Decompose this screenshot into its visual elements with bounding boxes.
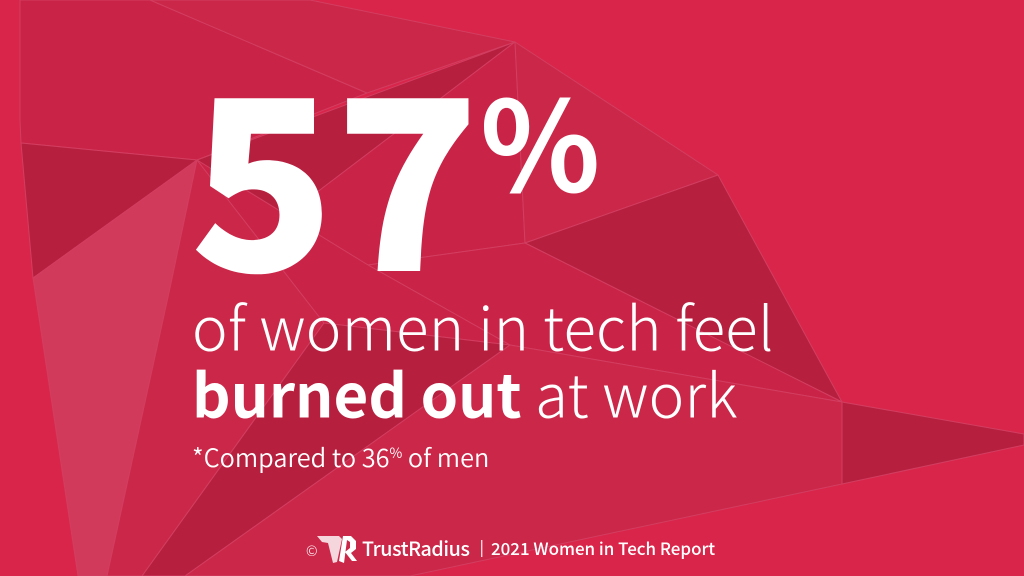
headline text: burned out at work [192,348,738,436]
headline text [192,282,774,436]
footnote: comparison to men: of men [402,439,489,475]
copyright symbol: © [306,541,318,561]
company name: TrustRadius [362,533,470,562]
divider [481,540,482,557]
icon: TrustRadius logo mark [317,536,357,563]
footnote: comparison to men: % [389,443,402,463]
report title: 2021 Women in Tech Report [491,535,715,560]
headline text: of women in tech feel [192,282,774,368]
big statistic: 57%: 57 [190,0,480,340]
footer branding [306,533,715,563]
big statistic: 57%: % [480,47,600,228]
footnote: comparison to men: *Compared to 36 [192,439,389,475]
